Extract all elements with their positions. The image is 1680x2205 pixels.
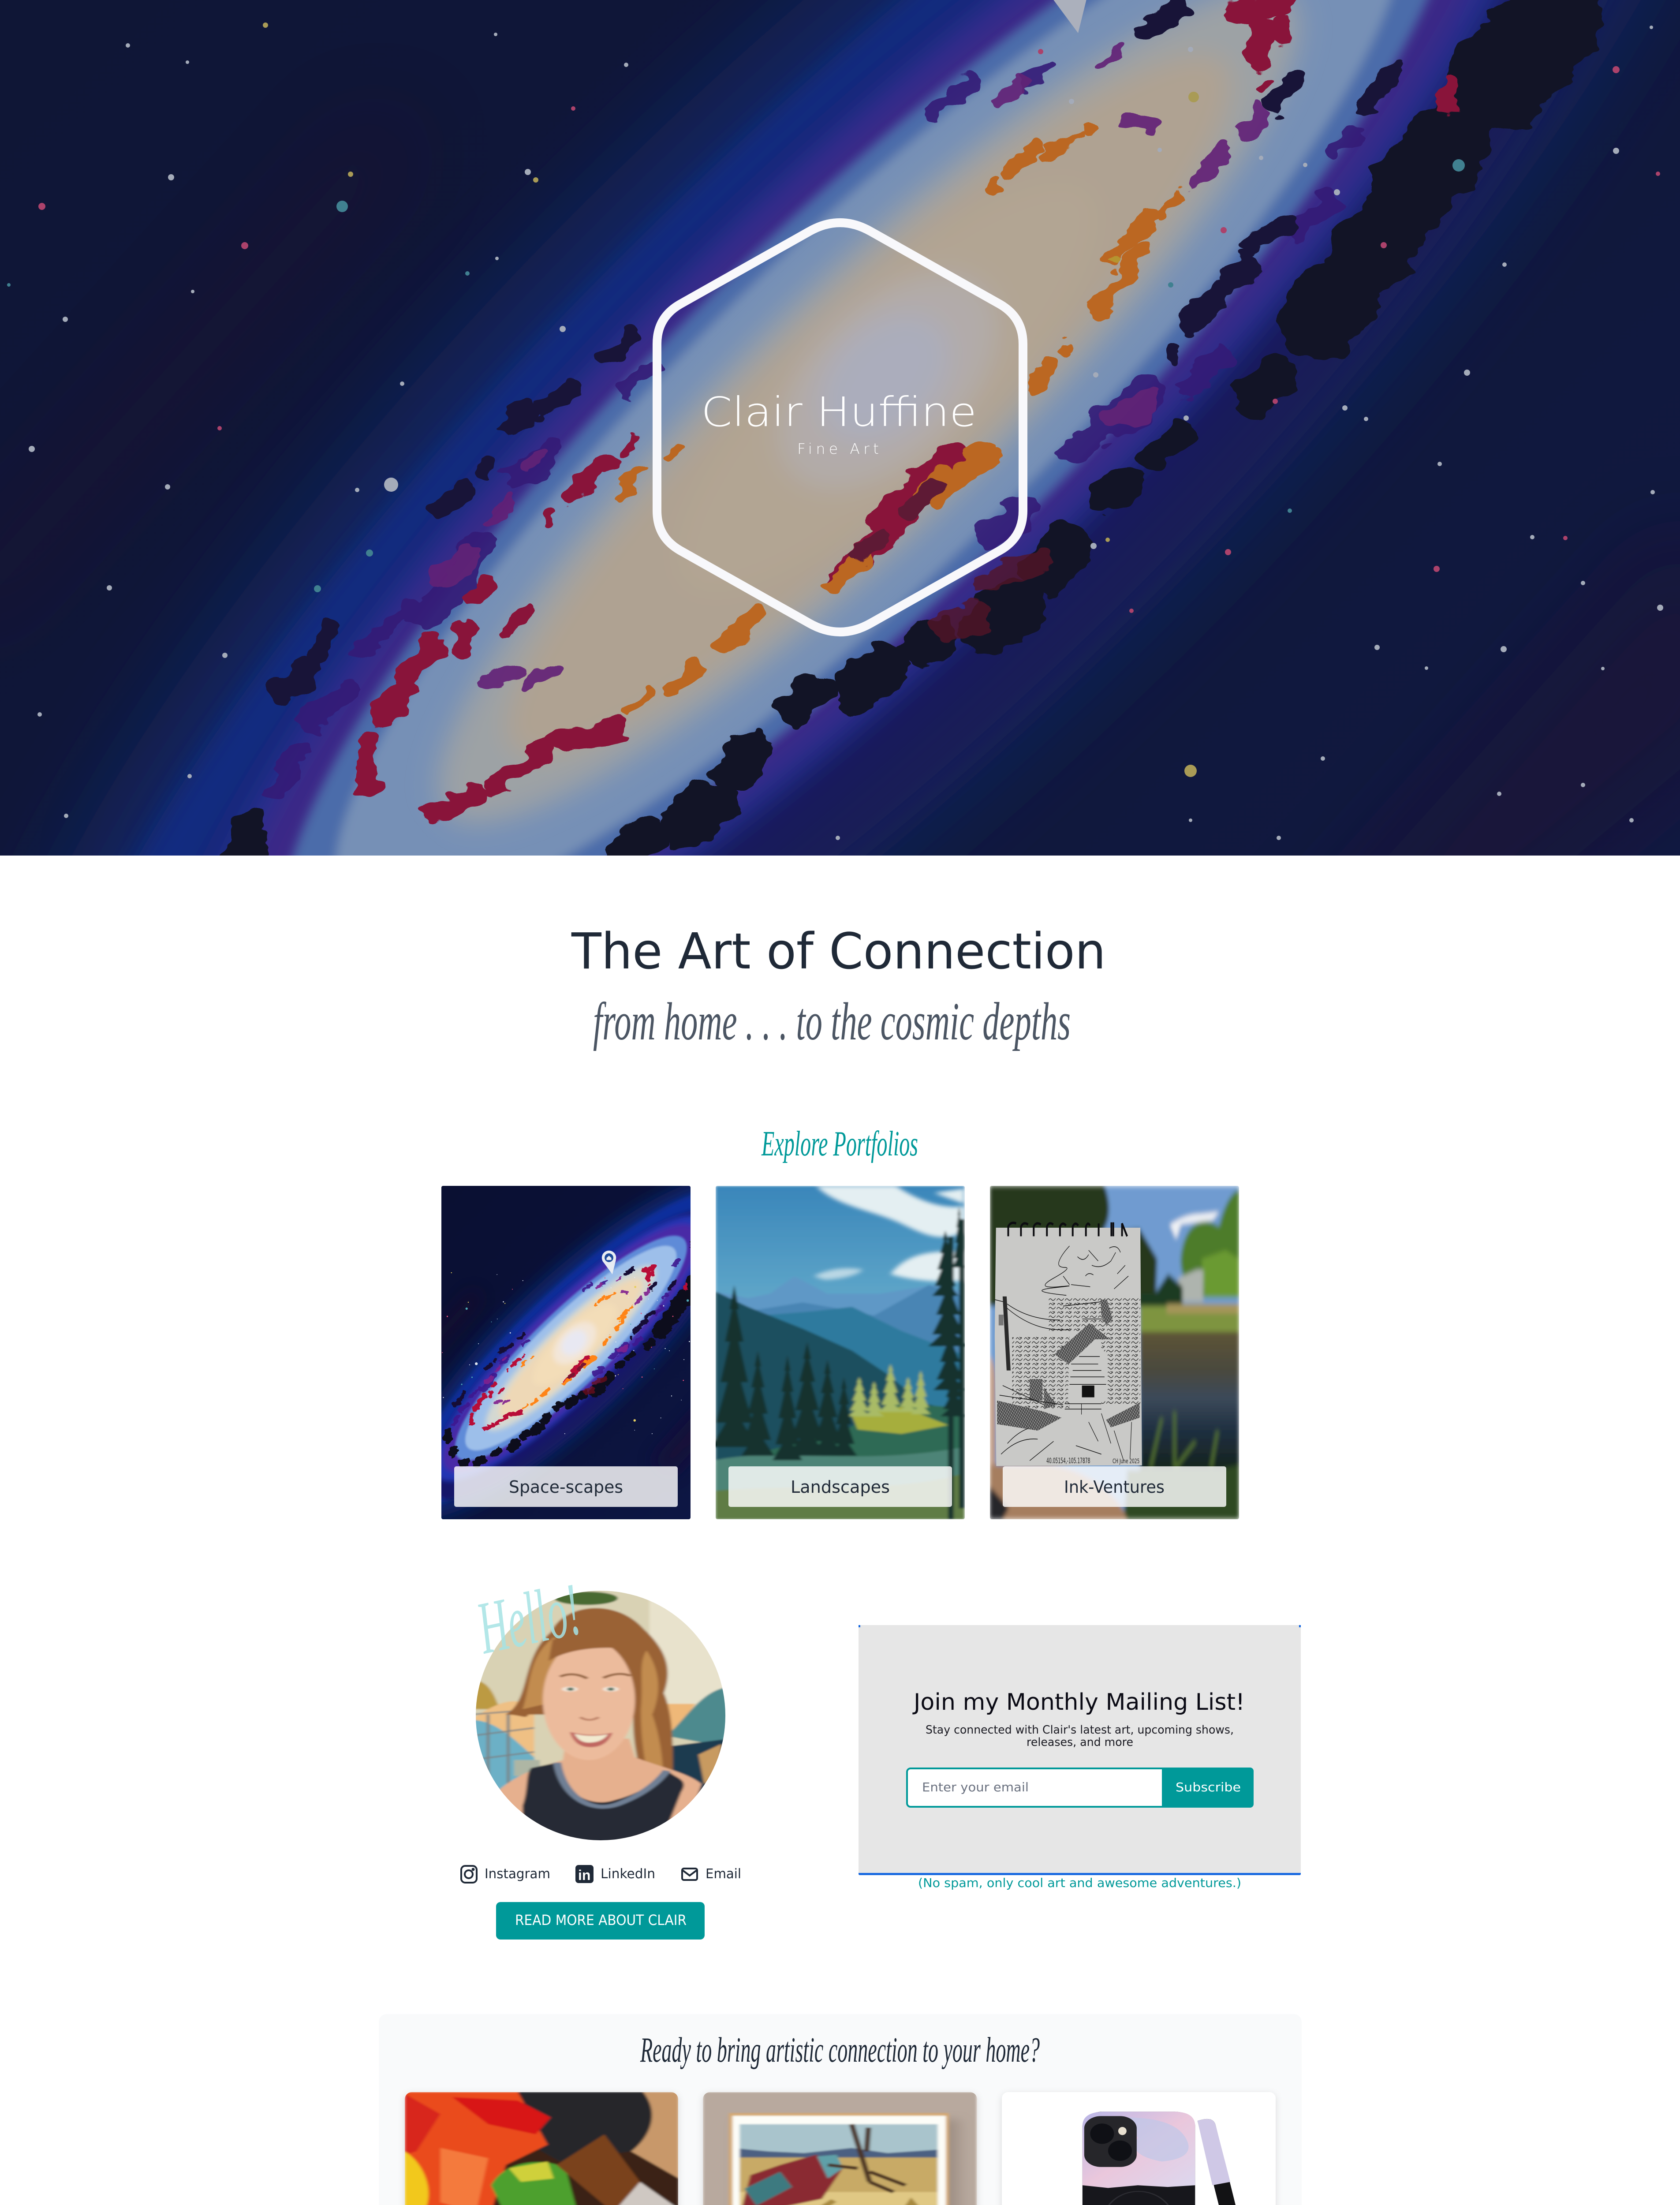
shop panel bbox=[379, 2014, 1302, 2205]
instagram label: Instagram bbox=[485, 1866, 550, 1882]
about section bbox=[461, 1567, 741, 1940]
social links bbox=[461, 1865, 741, 1883]
no spam note: (No spam, only cool art and awesome adventures.) bbox=[918, 1876, 1241, 1890]
mailing description: Stay connected with Clair's latest art, upcoming shows, bbox=[926, 1723, 1234, 1737]
mailing description: releases, and more bbox=[1027, 1736, 1133, 1749]
hero banner bbox=[0, 0, 1680, 856]
mailing list panel bbox=[859, 1625, 1301, 1890]
subscribe button: Subscribe bbox=[1176, 1780, 1241, 1794]
card image: sketchbook by river: CH June 2025 bbox=[1113, 1458, 1139, 1465]
hello script overlay: Hello! bbox=[470, 1567, 588, 1670]
linkedin label: LinkedIn bbox=[601, 1866, 655, 1882]
icon: instagram bbox=[461, 1866, 477, 1883]
card label: Ink-Ventures bbox=[1064, 1477, 1165, 1497]
portrait photo bbox=[471, 1589, 730, 1843]
icon: linkedin: in bbox=[578, 1867, 590, 1883]
read more button: READ MORE ABOUT CLAIR bbox=[515, 1912, 687, 1928]
card image: sketchbook by river bbox=[990, 1186, 1239, 1519]
image: paint palette and brushes bbox=[405, 2092, 679, 2205]
card label bbox=[728, 1466, 952, 1507]
portfolio card: ink-ventures bbox=[990, 1186, 1239, 1519]
logo tagline: Fine Art bbox=[797, 440, 879, 457]
read more button bbox=[496, 1902, 705, 1940]
main heading: The Art of Connection bbox=[571, 923, 1106, 980]
panel background bbox=[859, 1625, 1301, 1875]
email input bbox=[907, 1768, 1172, 1807]
card image: sketchbook by river: 40.05154,-105.17878 bbox=[1046, 1457, 1090, 1465]
card label: Space-scapes bbox=[509, 1477, 623, 1497]
email label: Email bbox=[706, 1866, 741, 1882]
card label: Landscapes bbox=[791, 1477, 890, 1497]
hexagon logo outline bbox=[657, 223, 1023, 632]
email input: Enter your email bbox=[922, 1780, 1029, 1794]
card label bbox=[454, 1466, 678, 1507]
card image: galaxy bbox=[354, 1135, 788, 1561]
icon: linkedin bbox=[575, 1865, 594, 1883]
portfolios heading: Explore Portfolios bbox=[761, 1125, 918, 1163]
shop card: accessories bbox=[1002, 2092, 1276, 2205]
subheading: from home . . . to the cosmic depths bbox=[593, 992, 1071, 1051]
shop heading: Ready to bring artistic connection to your home? bbox=[640, 2031, 1040, 2070]
subscribe button bbox=[1162, 1768, 1254, 1808]
shop card: prints bbox=[703, 2092, 977, 2205]
image: framed print over dresser bbox=[703, 2092, 977, 2205]
mailing description bbox=[926, 1723, 1234, 1749]
shop card: originals bbox=[405, 2092, 679, 2205]
icon: email bbox=[682, 1869, 697, 1880]
card image: mountain landscape bbox=[711, 1186, 968, 1519]
image: phone cases bbox=[1014, 2112, 1268, 2205]
panel background bbox=[379, 2014, 1302, 2205]
hero painting: galaxy bbox=[0, 0, 1680, 856]
card label bbox=[1003, 1466, 1226, 1507]
logo name: Clair Huffine bbox=[701, 389, 977, 436]
portfolio card: landscapes bbox=[711, 1186, 968, 1519]
portfolio card: space-scapes bbox=[441, 1186, 691, 1519]
mailing heading: Join my Monthly Mailing List! bbox=[912, 1689, 1245, 1715]
